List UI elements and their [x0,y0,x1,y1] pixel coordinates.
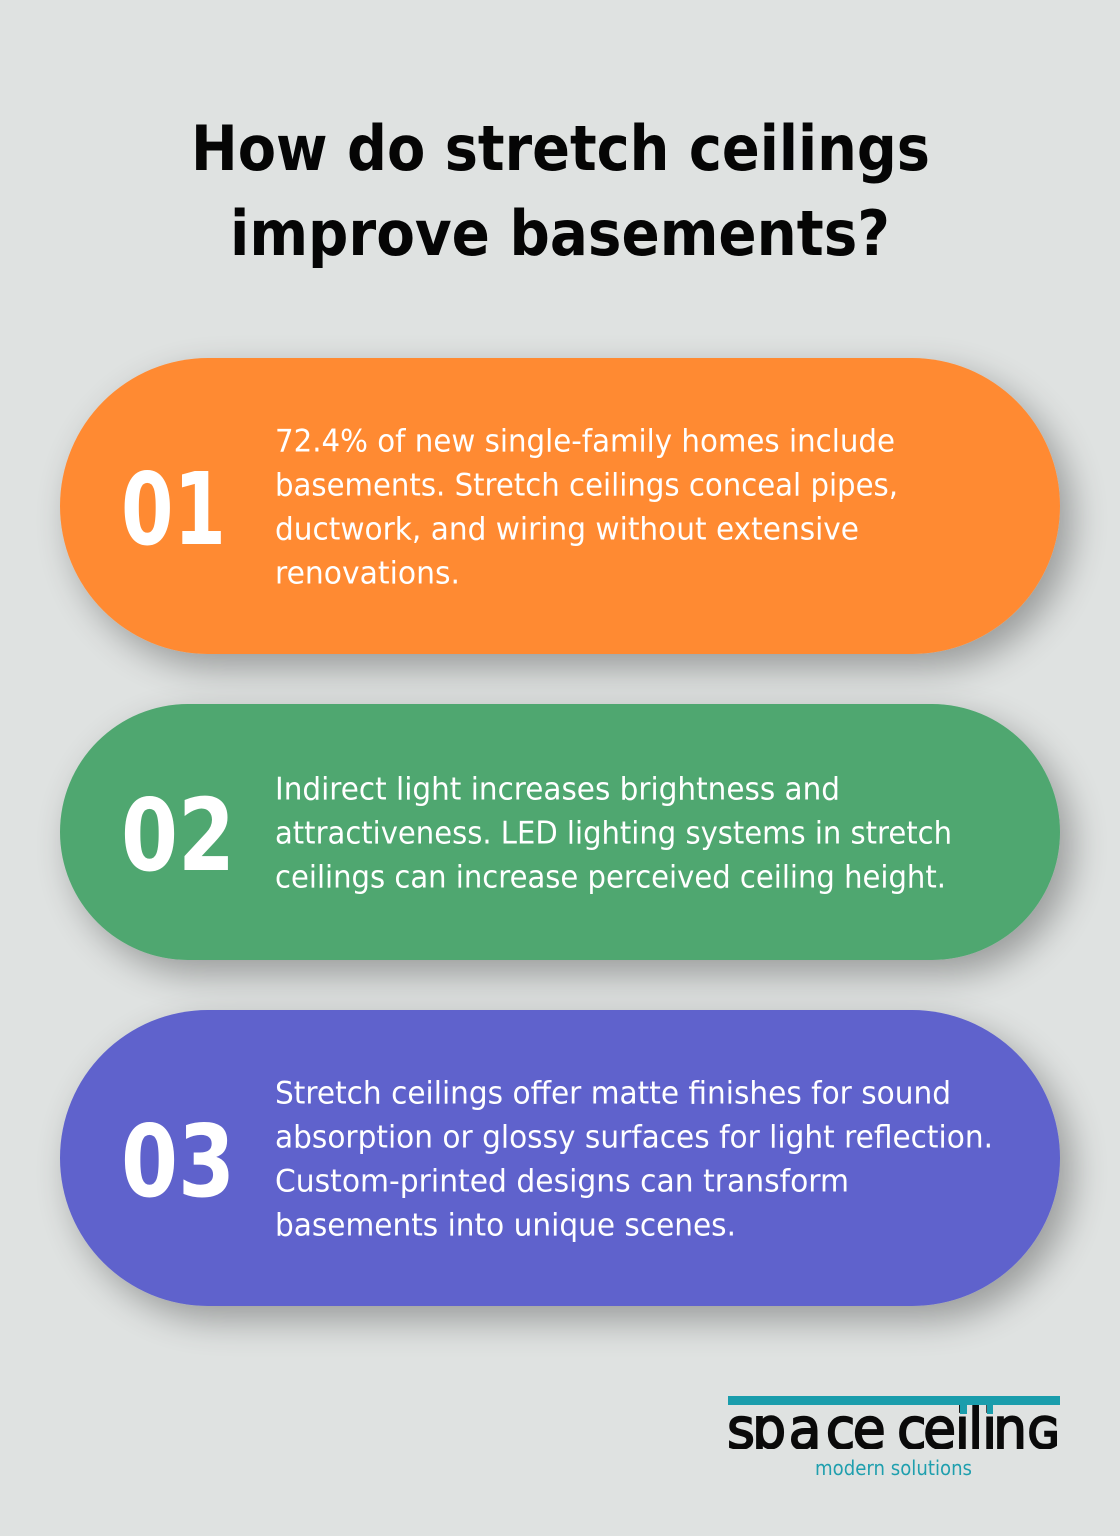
step 01 text: renovations. [275,556,460,592]
step 01 text: ductwork, and wiring without extensive [275,512,859,548]
number 02: 02 [121,777,235,894]
step 03 text: absorption or glossy surfaces for light reflection. [275,1120,993,1156]
purple pill background [60,1010,1060,1306]
panel: step 01 [60,358,1060,654]
title: How do stretch ceilings [191,112,930,185]
step 02 text: Indirect light increases brightness and [275,772,840,808]
title [191,112,930,270]
step 02 text: ceilings can increase perceived ceiling height. [275,860,946,896]
step 01 text [275,424,898,592]
logo tagline: modern solutions [815,1456,972,1480]
number 01: 01 [121,451,226,568]
step 03 text: Custom-printed designs can transform [275,1164,849,1200]
step 03 text [275,1076,993,1244]
orange pill background [60,358,1060,654]
step 02 text [275,772,952,896]
step 03 text: basements into unique scenes. [275,1208,736,1244]
title: improve basements? [230,197,890,270]
step 02 text: attractiveness. LED lighting systems in stretch [275,816,952,852]
step 01 text: basements. Stretch ceilings conceal pipes, [275,468,898,504]
step 03 text: Stretch ceilings offer matte finishes for sound [275,1076,951,1112]
panel: step 02 [60,704,1060,960]
number 03: 03 [121,1103,235,1220]
green pill background [60,704,1060,960]
panel: step 03 [60,1010,1060,1306]
step 01 text: 72.4% of new single-family homes include [275,424,895,460]
logo: space ceiling [727,1396,1060,1480]
logo teal ceiling bar [728,1396,1060,1414]
logo wordmark: space ceilinG [727,1396,1059,1461]
